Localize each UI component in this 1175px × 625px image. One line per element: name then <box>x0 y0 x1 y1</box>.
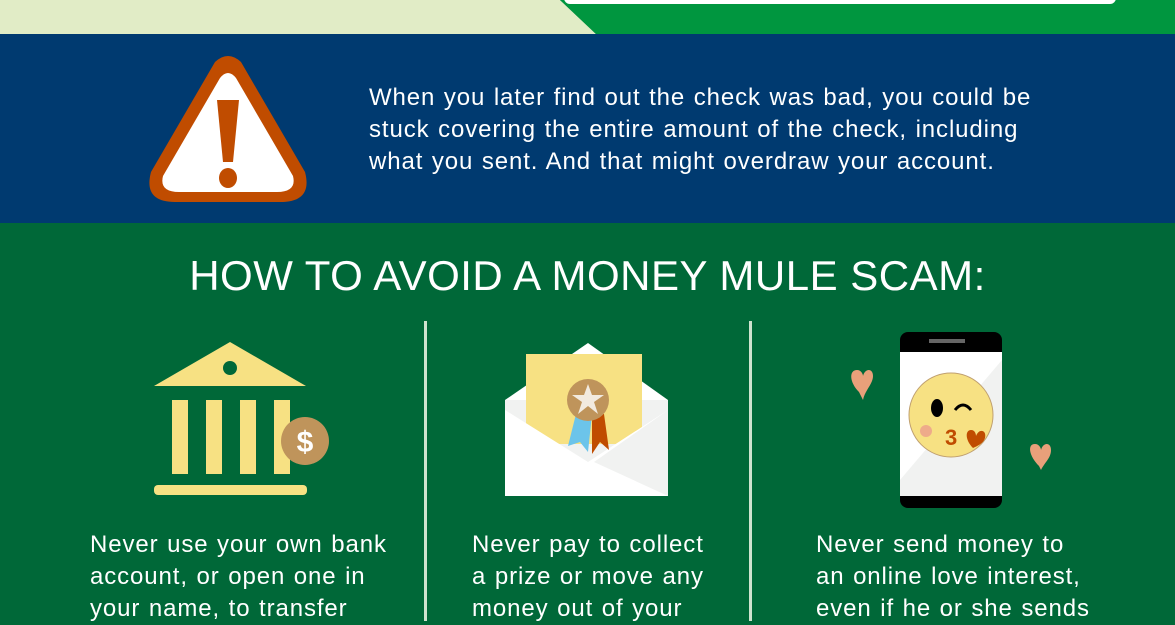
text: column 2 <box>472 531 704 622</box>
warning text: stuck covering the entire amount of the check, including <box>369 116 1018 143</box>
top strip <box>0 0 1175 34</box>
text: column 2: a prize or move any <box>472 563 704 590</box>
text: column 1: account, or open one in <box>90 563 366 590</box>
text: column 2: Never pay to collect <box>472 531 704 558</box>
panel: warning <box>0 34 1175 223</box>
icon: phone with kiss emoji <box>851 332 1051 508</box>
icon: prize envelope <box>505 343 668 496</box>
text: column 1: Never use your own bank <box>90 531 387 558</box>
text: column 1: your name, to transfer <box>90 595 348 622</box>
warning text: what you sent. And that might overdraw your account. <box>369 148 995 175</box>
icon: phone with kiss emoji: 3 <box>945 425 957 450</box>
text: column 3: an online love interest, <box>816 563 1081 590</box>
warning text: When you later find out the check was bad, you could be <box>369 84 1031 111</box>
warning text <box>369 84 1031 175</box>
text: column 1 <box>90 531 387 622</box>
icon: bank: $ <box>297 426 314 459</box>
text: column 2: money out of your <box>472 595 682 622</box>
icon: warning triangle <box>149 56 307 202</box>
text: column 3 <box>816 531 1090 622</box>
text: column 3: even if he or she sends <box>816 595 1090 622</box>
icon: bank <box>154 342 329 495</box>
heading: HOW TO AVOID A MONEY MULE SCAM: <box>189 252 986 299</box>
text: column 3: Never send money to <box>816 531 1064 558</box>
